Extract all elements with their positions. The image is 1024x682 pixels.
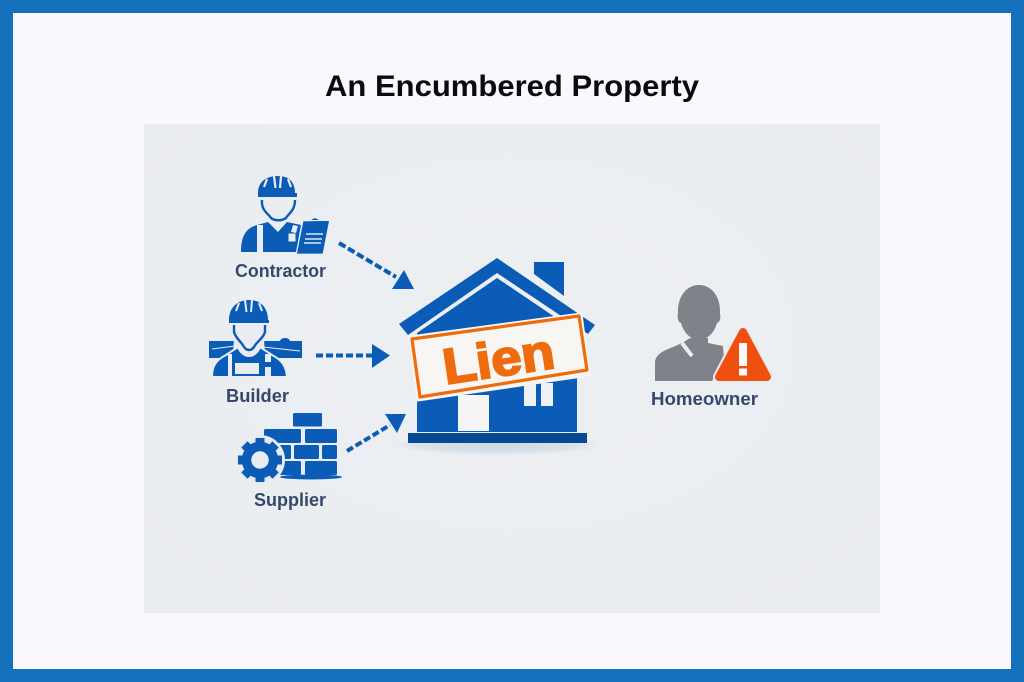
- title: An Encumbered Property: [325, 70, 699, 103]
- label: homeowner: Homeowner: [651, 388, 758, 409]
- label: contractor: Contractor: [235, 261, 326, 281]
- lien text: Lien: [439, 323, 558, 395]
- arrow: builder to house: [316, 344, 390, 368]
- house: [383, 258, 613, 456]
- house body: [417, 278, 577, 432]
- door: [458, 395, 489, 431]
- chimney: [534, 262, 564, 296]
- label: builder: Builder: [226, 386, 289, 406]
- icon: supplier bricks and gear: [235, 413, 342, 485]
- roof band: [399, 258, 595, 335]
- base: [408, 433, 587, 443]
- icon: homeowner: [655, 285, 767, 381]
- plank: [209, 341, 302, 358]
- icon: contractor: [241, 176, 330, 254]
- icon: warning triangle: [719, 332, 767, 377]
- panel: diagram background: [144, 124, 880, 613]
- lien sign: [410, 314, 589, 400]
- ground shadow: [383, 434, 613, 456]
- arrow: contractor to house: [339, 243, 414, 289]
- icon: builder: [209, 300, 302, 377]
- arrow: supplier to house: [347, 414, 406, 451]
- label: supplier: Supplier: [254, 490, 326, 510]
- windows: [524, 383, 553, 406]
